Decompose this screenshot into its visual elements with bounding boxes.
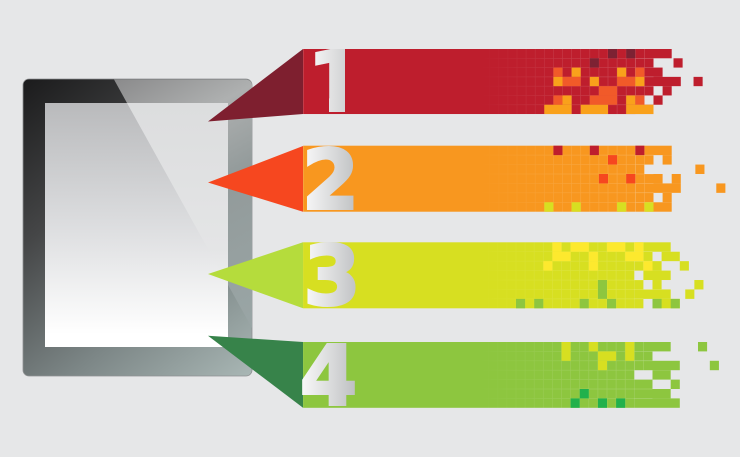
screen gloss [127, 103, 228, 285]
bar 1 pixels [303, 49, 703, 114]
number 2: 2 [302, 134, 359, 228]
arrow head 4 [208, 336, 303, 408]
number 3: 3 [303, 230, 361, 324]
number 1: 1 [307, 36, 365, 130]
bar 3 pixels [303, 242, 703, 308]
tablet [23, 79, 252, 376]
arrow head 2 [208, 146, 303, 212]
arrow head 1 [208, 49, 303, 122]
bar 4 pixels [303, 342, 719, 408]
arrow 4 [208, 330, 719, 424]
bar 2 pixels [303, 146, 725, 212]
arrow 3 [208, 230, 703, 324]
arrow 1 [208, 49, 703, 122]
tablet frame [23, 79, 252, 376]
arrow head 3 [208, 242, 303, 308]
number 4: 4 [300, 330, 357, 424]
tablet screen [45, 103, 228, 347]
frame gloss [114, 80, 252, 328]
arrow 2 [208, 134, 725, 228]
